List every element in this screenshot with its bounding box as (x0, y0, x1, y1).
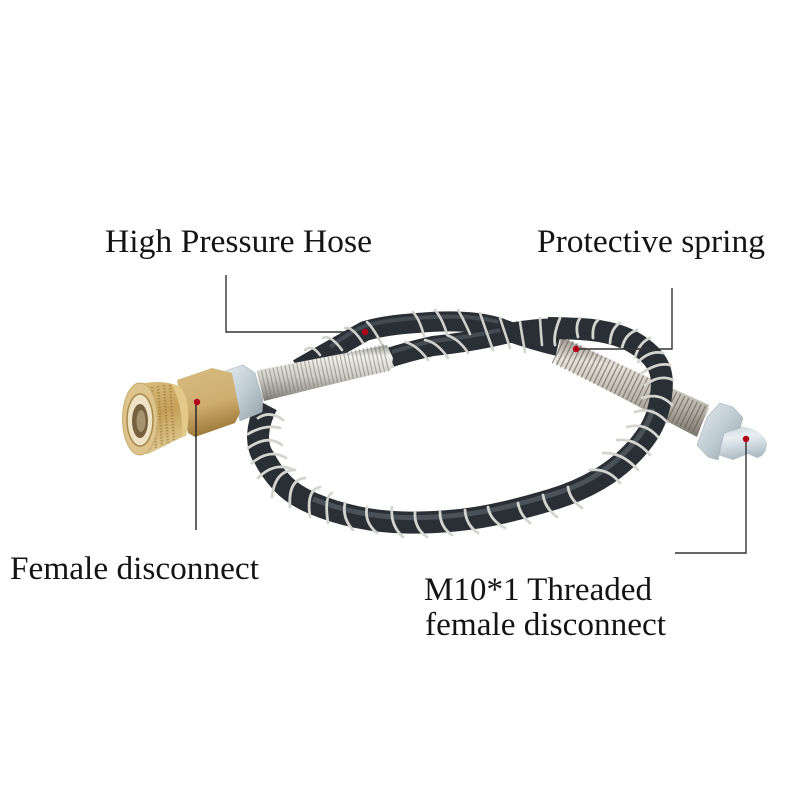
brass neck (172, 384, 188, 438)
high pressure hose: main loop (258, 328, 662, 523)
label: Female disconnect: Female disconnect (10, 551, 259, 587)
label: M10*1 Threaded female disconnect (424, 572, 666, 643)
hex nut: silver left (225, 365, 263, 421)
M10*1 threaded fitting (697, 403, 767, 460)
marker dot: high pressure hose (362, 329, 368, 335)
metal spring: left side (258, 345, 393, 401)
label: Protective spring: Protective spring (537, 224, 765, 260)
coils on main loop (248, 318, 673, 537)
knurled collar (139, 382, 182, 454)
leader line: female disconnect (195, 403, 197, 530)
leader line: high pressure hose (226, 275, 345, 332)
threaded stud (718, 425, 767, 460)
high pressure hose: back strands (298, 317, 565, 369)
label: M10*1 Threaded female disconnect: M10*1 Threaded (424, 572, 652, 608)
marker dot: protective spring (573, 346, 579, 352)
metal spring: right side (555, 337, 709, 437)
leader line: threaded disconnect (675, 440, 746, 553)
leader line: protective spring (578, 288, 672, 349)
coils on upper strands (305, 310, 542, 367)
hex nut: zinc right (697, 403, 743, 460)
female disconnect: brass fitting (122, 368, 240, 455)
marker dot: threaded disconnect (743, 436, 749, 442)
marker dot: female disconnect (194, 399, 200, 405)
product photo: hose assembly (122, 310, 767, 537)
label: M10*1 Threaded female disconnect: female disconnect (425, 607, 666, 643)
brass hex body (177, 368, 240, 437)
collar face (122, 383, 158, 455)
label: High Pressure Hose: High Pressure Hose (105, 224, 372, 260)
